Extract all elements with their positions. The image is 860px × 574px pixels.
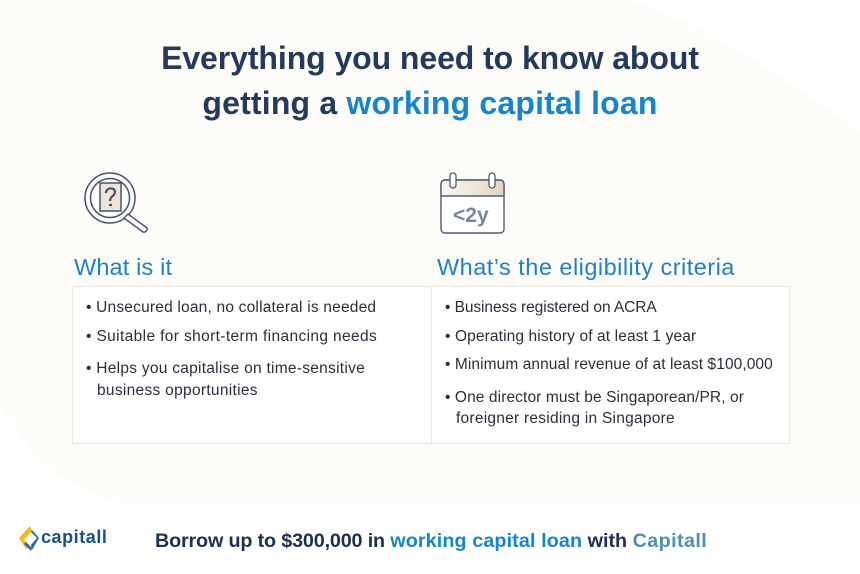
left list: • Helps you capitalise on time-sensitive (86, 360, 365, 377)
icon: calendar with less than 2y (440, 172, 505, 234)
panel: details table (72, 286, 790, 444)
title: Everything you need to know about (161, 40, 699, 76)
title: getting a working capital loan (202, 85, 658, 121)
right list: • Operating history of at least 1 year (445, 328, 696, 345)
left list: • Unsecured loan, no collateral is needed (86, 299, 376, 316)
heading: what is it: What is it (74, 254, 172, 280)
left list (86, 299, 377, 399)
left list: • Suitable for short-term financing needs (86, 328, 377, 345)
footer call to action: Borrow up to $300,000 in working capital loan with Capitall (155, 530, 707, 552)
logo: capitall: capitall (41, 527, 107, 547)
heading: eligibility criteria: What’s the eligibility criteria (437, 254, 735, 280)
right list: • Minimum annual revenue of at least $100,000 (445, 356, 773, 373)
logo: capitall (19, 526, 107, 551)
right list (445, 299, 773, 427)
left list: business opportunities (97, 382, 258, 399)
icon: calendar with less than 2y: <2y (453, 204, 489, 227)
title (161, 40, 699, 121)
right list: foreigner residing in Singapore (456, 410, 675, 427)
right list: • Business registered on ACRA (445, 299, 657, 316)
right list: • One director must be Singaporean/PR, or (445, 389, 744, 406)
icon: magnifying glass with question mark (84, 172, 148, 233)
